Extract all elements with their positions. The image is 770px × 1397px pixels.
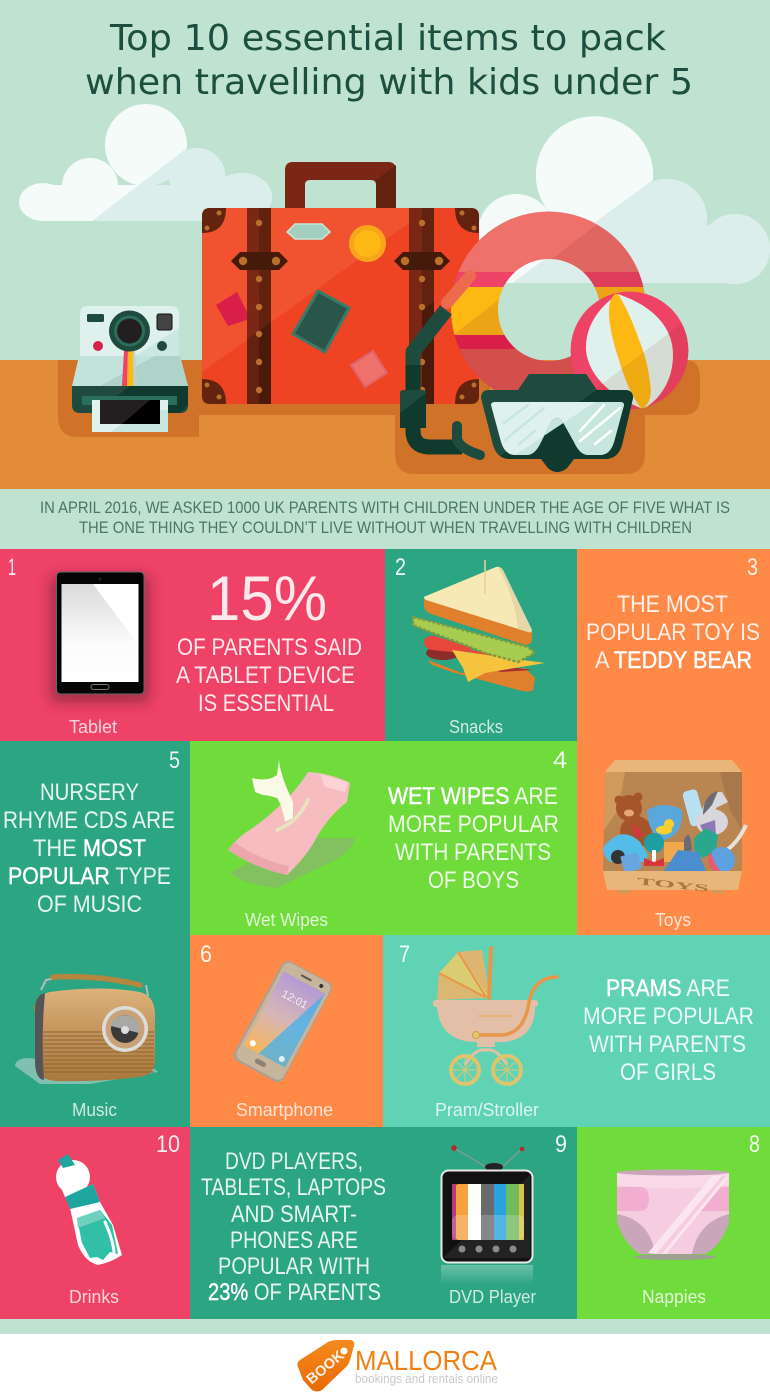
title [85, 18, 693, 103]
text: dvd players: AND SMART- [231, 1201, 357, 1228]
number 9: 9 [555, 1131, 567, 1158]
suitcase straps [247, 208, 271, 404]
panel 1: tablet [0, 549, 385, 741]
label: Toys: Toys [655, 910, 691, 930]
logo tagline: bookings and rentals online [355, 1372, 498, 1386]
intro strip [0, 489, 770, 549]
suitcase pink sticker [216, 292, 247, 326]
toy: block A [664, 842, 684, 862]
text: nursery rhyme: OF MUSIC [37, 891, 142, 918]
label: Snacks: Snacks [449, 717, 503, 737]
logo tag [297, 1340, 354, 1392]
stat: 15%: 15% [207, 564, 327, 634]
panel 2: snacks [385, 549, 577, 741]
toy: bib with duck [647, 805, 682, 840]
box front: TOYS [637, 876, 710, 895]
text: prams popular: WITH PARENTS [589, 1031, 746, 1058]
panel 8: nappies [577, 1127, 770, 1319]
text: dvd players: TABLETS, LAPTOPS [201, 1174, 386, 1201]
number 7: 7 [399, 941, 410, 968]
text: wet wipes popular: WET WIPES ARE [388, 783, 558, 810]
icon: smartphone [231, 958, 334, 1084]
panel 9: dvd player [190, 1127, 577, 1319]
label: Wet Wipes: Wet Wipes [245, 910, 328, 930]
number 4: 4 [553, 747, 567, 774]
text: tablet stat: IS ESSENTIAL [198, 690, 334, 717]
intro text: THE ONE THING THEY COULDN’T LIVE WITHOUT WHEN TRAVELLING WITH CHILDREN [79, 519, 692, 537]
panel 5: music [0, 741, 190, 1127]
text: dvd players: PHONES ARE [230, 1227, 358, 1254]
text: most popular toy: THE MOST [617, 591, 728, 618]
background: ground [0, 360, 770, 489]
number 1: 1 [8, 554, 16, 581]
text: tablet stat: OF PARENTS SAID [177, 634, 362, 661]
footer background [0, 1334, 770, 1397]
icon: smartphone: 12:01 [279, 988, 309, 1012]
icon: tv [441, 1145, 533, 1285]
text: dvd players: DVD PLAYERS, [225, 1148, 363, 1175]
text: dvd players: POPULAR WITH [218, 1253, 370, 1280]
text: nursery rhyme: THE MOST [33, 835, 146, 862]
icon: wet wipes [228, 760, 355, 888]
title: Top 10 essential items to pack [109, 18, 666, 59]
panel 3: toys [577, 549, 770, 935]
text: nursery rhyme: POPULAR TYPE [8, 863, 171, 890]
text: wet wipes popular [388, 783, 559, 894]
text: wet wipes popular: MORE POPULAR [388, 811, 559, 838]
panel 7: pram [383, 935, 770, 1127]
suitcase label tag [287, 224, 330, 239]
number 2: 2 [395, 554, 406, 581]
number 6: 6 [200, 941, 212, 968]
text: dvd players: 23% OF PARENTS [208, 1279, 381, 1306]
icon: camera [72, 306, 188, 432]
icon: snorkel [400, 276, 480, 455]
box front [603, 871, 742, 895]
text: dvd players [201, 1148, 386, 1306]
teddy bear [614, 792, 652, 848]
toy: rocking horse [683, 791, 746, 858]
logo BOOK text: BOOK [304, 1347, 348, 1388]
background: sky [0, 0, 770, 360]
icon: diving mask [481, 374, 633, 472]
label: Tablet: Tablet [69, 717, 117, 737]
icon: tablet [50, 572, 150, 703]
suitcase coral sticker [351, 351, 387, 387]
icon: suitcase [202, 162, 479, 404]
suitcase buckles [231, 252, 288, 270]
panel 6: smartphone [190, 935, 383, 1127]
label: Smartphone: Smartphone [236, 1100, 333, 1120]
icon: swim ring [451, 212, 645, 390]
text: prams popular [583, 975, 754, 1086]
icon: nappy [617, 1170, 729, 1260]
icon: bottle [56, 1154, 122, 1265]
text: nursery rhyme [3, 779, 175, 918]
label: Nappies: Nappies [642, 1287, 706, 1307]
object shadows on ground [58, 360, 700, 474]
text: prams popular: PRAMS ARE [606, 975, 730, 1002]
text: tablet stat [176, 634, 362, 717]
number 5: 5 [169, 747, 180, 774]
text: most popular toy [586, 591, 760, 674]
toy: shoes [664, 850, 706, 871]
icon: sandwich [413, 560, 545, 692]
text: wet wipes popular: WITH PARENTS [395, 839, 551, 866]
panel 4: wet wipes [190, 741, 577, 935]
toy: bottle [682, 789, 706, 827]
suitcase rivets [204, 210, 476, 400]
label: Music: Music [72, 1100, 117, 1120]
title: when travelling with kids under 5 [85, 62, 693, 103]
suitcase body [202, 208, 479, 404]
suitcase handle [285, 162, 396, 208]
logo hole [340, 1348, 348, 1354]
toy: car [603, 834, 648, 862]
cloud: right [478, 116, 770, 284]
toy: block 3 [620, 852, 642, 873]
text: tablet stat: A TABLET DEVICE [176, 662, 355, 689]
toy: block 2 [694, 828, 718, 858]
suitcase green sticker [293, 291, 349, 352]
panel 10: drinks [0, 1127, 190, 1319]
text: nursery rhyme: NURSERY [40, 779, 139, 806]
text: wet wipes popular: OF BOYS [428, 867, 519, 894]
toy: rattle [644, 833, 664, 866]
icon: toy box [603, 760, 746, 895]
cloud: left [19, 104, 272, 221]
icon: radio [15, 977, 158, 1084]
icon: beach ball [570, 292, 688, 410]
suitcase corners [202, 208, 226, 233]
number 8: 8 [749, 1131, 760, 1158]
intro text [40, 499, 730, 537]
logo wordmark: MALLORCA [355, 1345, 497, 1376]
bottom strip [0, 1319, 770, 1334]
text: most popular toy: A TEDDY BEAR [595, 647, 752, 674]
suitcase yellow sticker [349, 225, 386, 262]
icon: pram [433, 948, 557, 1084]
logo: Book Mallorca [297, 1340, 498, 1392]
number 3: 3 [747, 554, 758, 581]
label: DVD Player: DVD Player [449, 1287, 536, 1307]
toy: ball [709, 847, 735, 873]
text: prams popular: OF GIRLS [620, 1059, 716, 1086]
number 10: 10 [156, 1131, 180, 1158]
label: Drinks: Drinks [69, 1287, 119, 1307]
label: Pram/Stroller: Pram/Stroller [435, 1100, 539, 1120]
text: nursery rhyme: RHYME CDS ARE [3, 807, 175, 834]
